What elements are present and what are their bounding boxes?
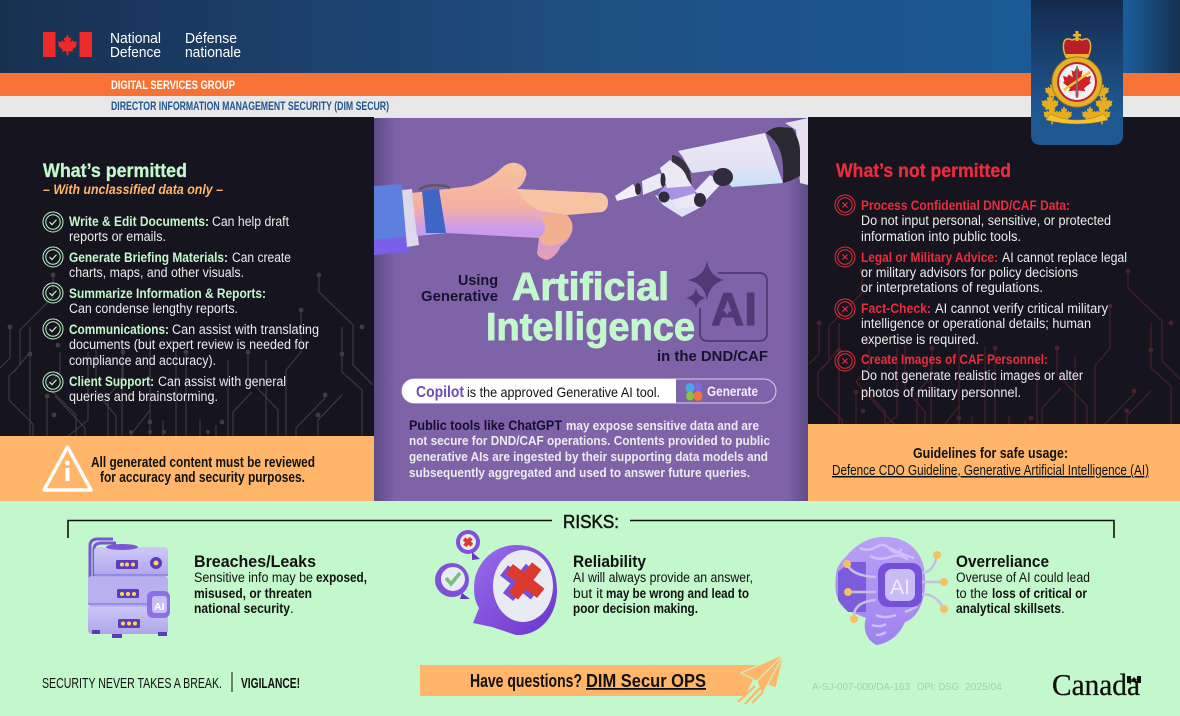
risk: breaches: Sensitive info may be bbox=[194, 570, 313, 585]
title: in the DND/CAF: in the DND/CAF bbox=[657, 349, 768, 365]
paragraph: public tools: Public tools like ChatGPT bbox=[409, 418, 563, 433]
list item: briefing materials: Generate Briefing Materials: bbox=[69, 250, 228, 265]
callout: guidelines: Guidelines for safe usage: bbox=[913, 445, 1068, 462]
document reference: 2025/04 bbox=[965, 681, 1002, 693]
risk: reliability: AI will always provide an answer, bbox=[573, 570, 753, 585]
header banner bbox=[0, 0, 1180, 117]
paragraph: public tools: may expose sensitive data and are bbox=[566, 418, 759, 433]
questions banner: DIM Secur OPS bbox=[586, 671, 706, 691]
department name: Defence bbox=[110, 45, 161, 61]
risk: reliability: poor decision making. bbox=[573, 601, 698, 616]
list item: confidential data: information into public tools. bbox=[861, 229, 1021, 244]
paragraph: public tools: subsequently aggregated and used to answer future queries. bbox=[409, 465, 750, 480]
list item: images of personnel: Do not generate realistic images or alter bbox=[861, 368, 1083, 383]
logo: Canadian flag bbox=[43, 32, 92, 57]
panel: what's not permitted bbox=[808, 117, 1180, 444]
heading: risks: RISKS: bbox=[563, 512, 619, 532]
department name bbox=[110, 31, 241, 61]
list item: fact-check: AI cannot verify critical military bbox=[935, 301, 1108, 316]
list item: client support: Client Support: bbox=[69, 374, 154, 389]
panel: centre bbox=[374, 118, 808, 501]
list item: write and edit: Can help draft bbox=[212, 214, 289, 229]
risk: overreliance: Overuse of AI could lead bbox=[956, 570, 1090, 585]
icon: paper plane bbox=[738, 654, 784, 704]
paragraph: public tools: not secure for DND/CAF operations. Contents provided to public bbox=[409, 433, 770, 448]
list item: briefing materials: charts, maps, and other visuals. bbox=[69, 265, 244, 280]
questions banner bbox=[420, 654, 784, 704]
Canada wordmark: Canada bbox=[1052, 667, 1140, 702]
list item: confidential data bbox=[835, 195, 1111, 244]
list item: communications: compliance and accuracy). bbox=[69, 353, 216, 368]
list item: fact-check: Fact-Check: bbox=[861, 301, 931, 316]
risk: breaches: Breaches/Leaks bbox=[194, 552, 316, 571]
list item: summarize: Can condense lengthy reports. bbox=[69, 301, 238, 316]
list item: images of personnel: photos of military personnel. bbox=[861, 385, 1021, 400]
list item: legal advice: or interpretations of regulations. bbox=[861, 280, 1043, 295]
crown bbox=[1063, 31, 1091, 58]
list item: images of personnel bbox=[835, 351, 1083, 400]
copilot pill bbox=[402, 379, 776, 403]
title: using generative: Using bbox=[458, 273, 498, 289]
title: artificial intelligence bbox=[486, 266, 695, 349]
illustration: robot hand bbox=[615, 118, 808, 217]
title: using generative: Generative bbox=[421, 289, 498, 305]
risk: overreliance bbox=[835, 537, 1090, 645]
list item: summarize: Summarize Information & Reports: bbox=[69, 286, 266, 301]
list item: communications: documents (but expert review is needed for bbox=[69, 337, 309, 352]
list item: legal advice: or military advisors for policy decisions bbox=[861, 265, 1078, 280]
list item: legal advice bbox=[835, 247, 1127, 295]
callout: review warning bbox=[0, 436, 374, 501]
footer slogan: VIGILANCE! bbox=[241, 675, 300, 692]
risk: breaches: national security bbox=[194, 601, 290, 616]
list item: write and edit: Write & Edit Documents: bbox=[69, 214, 209, 229]
department name: National bbox=[110, 31, 161, 47]
risk: overreliance: Overreliance bbox=[956, 552, 1049, 571]
icon: copilot bbox=[686, 382, 702, 401]
list item: confidential data: Process Confidential DND/CAF Data: bbox=[861, 198, 1070, 213]
list item: communications: Can assist with translating bbox=[172, 322, 319, 337]
group name: DIGITAL SERVICES GROUP bbox=[111, 78, 235, 92]
subheading: unclassified only: – With unclassified data only – bbox=[43, 181, 223, 197]
copilot pill: is the approved Generative AI tool. bbox=[467, 384, 660, 400]
risk: breaches: misused, or threaten bbox=[194, 586, 312, 601]
department name: Défense bbox=[185, 31, 237, 47]
document reference bbox=[812, 681, 1002, 693]
badge bbox=[1052, 57, 1102, 107]
list item: communications bbox=[43, 319, 319, 368]
directorate name: DIRECTOR INFORMATION MANAGEMENT SECURITY (DIM SECUR) bbox=[111, 101, 389, 113]
risk: overreliance: analytical skillsets bbox=[956, 601, 1061, 616]
list item: legal advice: Legal or Military Advice: bbox=[861, 250, 998, 265]
list item: summarize bbox=[43, 283, 266, 316]
icon: speech bubbles bbox=[435, 530, 557, 635]
list item: fact-check bbox=[835, 299, 1108, 347]
callout: review warning: for accuracy and security purposes. bbox=[100, 469, 305, 486]
crest tab bbox=[1031, 0, 1123, 145]
copilot pill: Generate bbox=[707, 384, 758, 399]
list item: images of personnel: Create Images of CAF Personnel: bbox=[861, 352, 1048, 367]
list item: legal advice: AI cannot replace legal bbox=[1002, 250, 1127, 265]
icon: AI brain: AI bbox=[890, 576, 910, 599]
list item: fact-check: intelligence or operational details; human bbox=[861, 316, 1091, 331]
risk: reliability: may be wrong and lead to bbox=[606, 586, 749, 601]
questions banner: Have questions? bbox=[470, 671, 582, 691]
list item: briefing materials: Can create bbox=[232, 250, 291, 265]
document reference: OPI: DSG bbox=[917, 681, 959, 693]
risk: reliability bbox=[435, 530, 753, 635]
title: artificial intelligence: Intelligence bbox=[486, 306, 695, 349]
list item: communications: Communications: bbox=[69, 322, 169, 337]
risks section frame bbox=[68, 512, 1114, 538]
paragraph: public tools: generative AIs are ingested by their supporting data models and bbox=[409, 449, 768, 464]
department name: nationale bbox=[185, 45, 241, 61]
heading: what's not permitted: What’s not permitted bbox=[836, 160, 1011, 182]
risk: reliability: but it bbox=[573, 586, 603, 601]
icon: AI sparkle box: AI bbox=[711, 283, 757, 335]
copilot pill: Copilot bbox=[416, 384, 465, 401]
risk: breaches: exposed, bbox=[316, 570, 367, 585]
list item: client support bbox=[43, 372, 286, 404]
illustration: human hand bbox=[374, 163, 608, 260]
laurel leaves bbox=[1042, 82, 1112, 124]
callout: review warning: All generated content must be reviewed bbox=[91, 454, 315, 471]
list item: confidential data: Do not input personal, sensitive, or protected bbox=[861, 213, 1111, 228]
risk: breaches: . bbox=[290, 601, 294, 616]
footer slogan: SECURITY NEVER TAKES A BREAK. bbox=[42, 675, 222, 692]
panel: what's permitted bbox=[0, 117, 374, 501]
risk: reliability: Reliability bbox=[573, 552, 646, 571]
title: using generative bbox=[421, 273, 498, 305]
icon: server stack bbox=[88, 539, 170, 638]
title: artificial intelligence: Artificial bbox=[512, 266, 669, 309]
list item: write and edit: reports or emails. bbox=[69, 229, 166, 244]
list item: write and edit bbox=[43, 212, 289, 244]
heading: what's permitted: What’s permitted bbox=[43, 161, 187, 182]
list item: fact-check: expertise is required. bbox=[861, 332, 979, 347]
list item: client support: queries and brainstorming. bbox=[69, 389, 218, 404]
risk: breaches bbox=[88, 539, 367, 638]
icon: AI sparkle box bbox=[686, 260, 767, 341]
list item: briefing materials bbox=[43, 247, 291, 280]
list item: client support: Can assist with general bbox=[158, 374, 286, 389]
risk: overreliance: loss of critical or bbox=[992, 586, 1088, 601]
risk: overreliance: to the bbox=[956, 586, 988, 601]
icon: AI brain bbox=[835, 537, 948, 645]
risk: overreliance: . bbox=[1061, 601, 1065, 616]
paragraph: public tools bbox=[409, 418, 770, 480]
icon: warning triangle bbox=[44, 447, 91, 490]
callout: guidelines bbox=[808, 424, 1180, 501]
icon: server stack: AI bbox=[154, 601, 165, 613]
document reference: A-SJ-007-000/DA-163 bbox=[812, 681, 910, 693]
